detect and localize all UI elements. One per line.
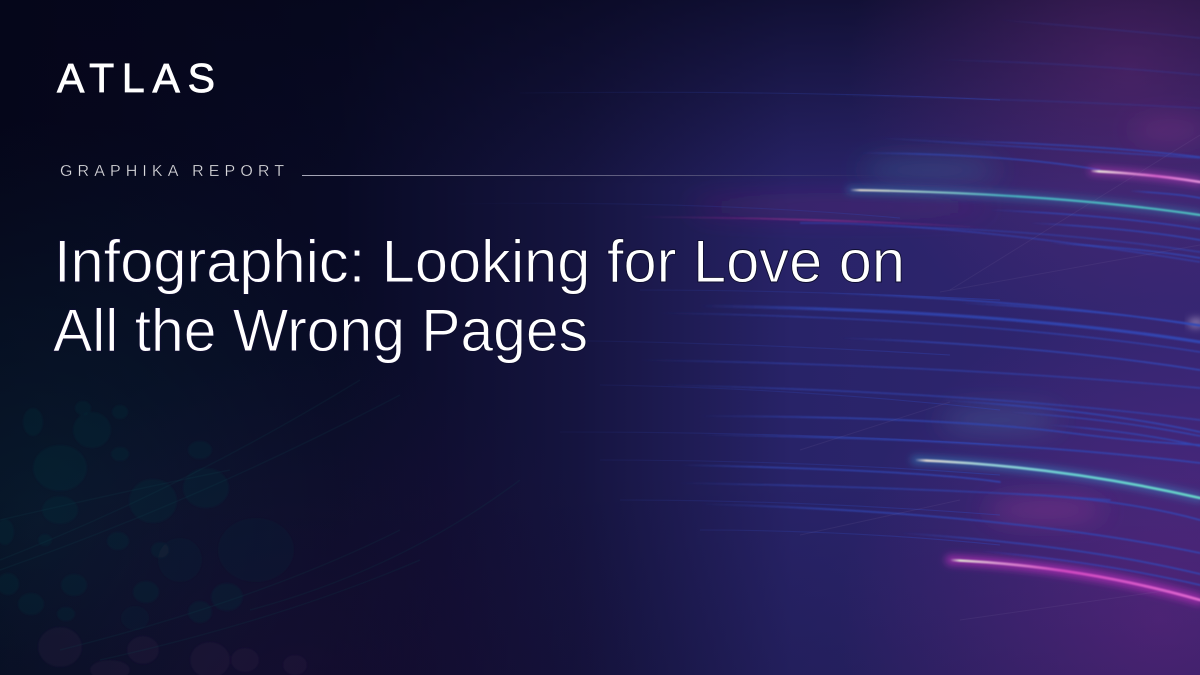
glowing magenta streak lower bbox=[950, 560, 1200, 600]
thin blue light trails bbox=[640, 20, 1200, 585]
bubble texture bottom left bbox=[0, 401, 307, 675]
faint diagonal sweeps bottom left bbox=[0, 380, 520, 660]
divider rule bbox=[302, 175, 880, 176]
logo: ATLAS: ATLAS bbox=[57, 55, 215, 101]
soft light blooms bbox=[690, 121, 1200, 519]
magenta trail behind title bbox=[640, 217, 1200, 262]
label: Graphika Report: GRAPHIKA REPORT bbox=[60, 163, 284, 180]
title: All the Wrong Pages bbox=[53, 297, 588, 364]
title bbox=[53, 228, 905, 364]
long faint blue trails reaching the centre bbox=[450, 92, 1000, 545]
faint diagonal hairlines bbox=[800, 135, 1200, 620]
glowing cyan streak upper bbox=[850, 190, 1200, 215]
glowing magenta streak upper bbox=[1092, 171, 1200, 182]
glowing cyan streak lower bbox=[915, 460, 1200, 498]
title: Infographic: Looking for Love on bbox=[54, 228, 905, 295]
